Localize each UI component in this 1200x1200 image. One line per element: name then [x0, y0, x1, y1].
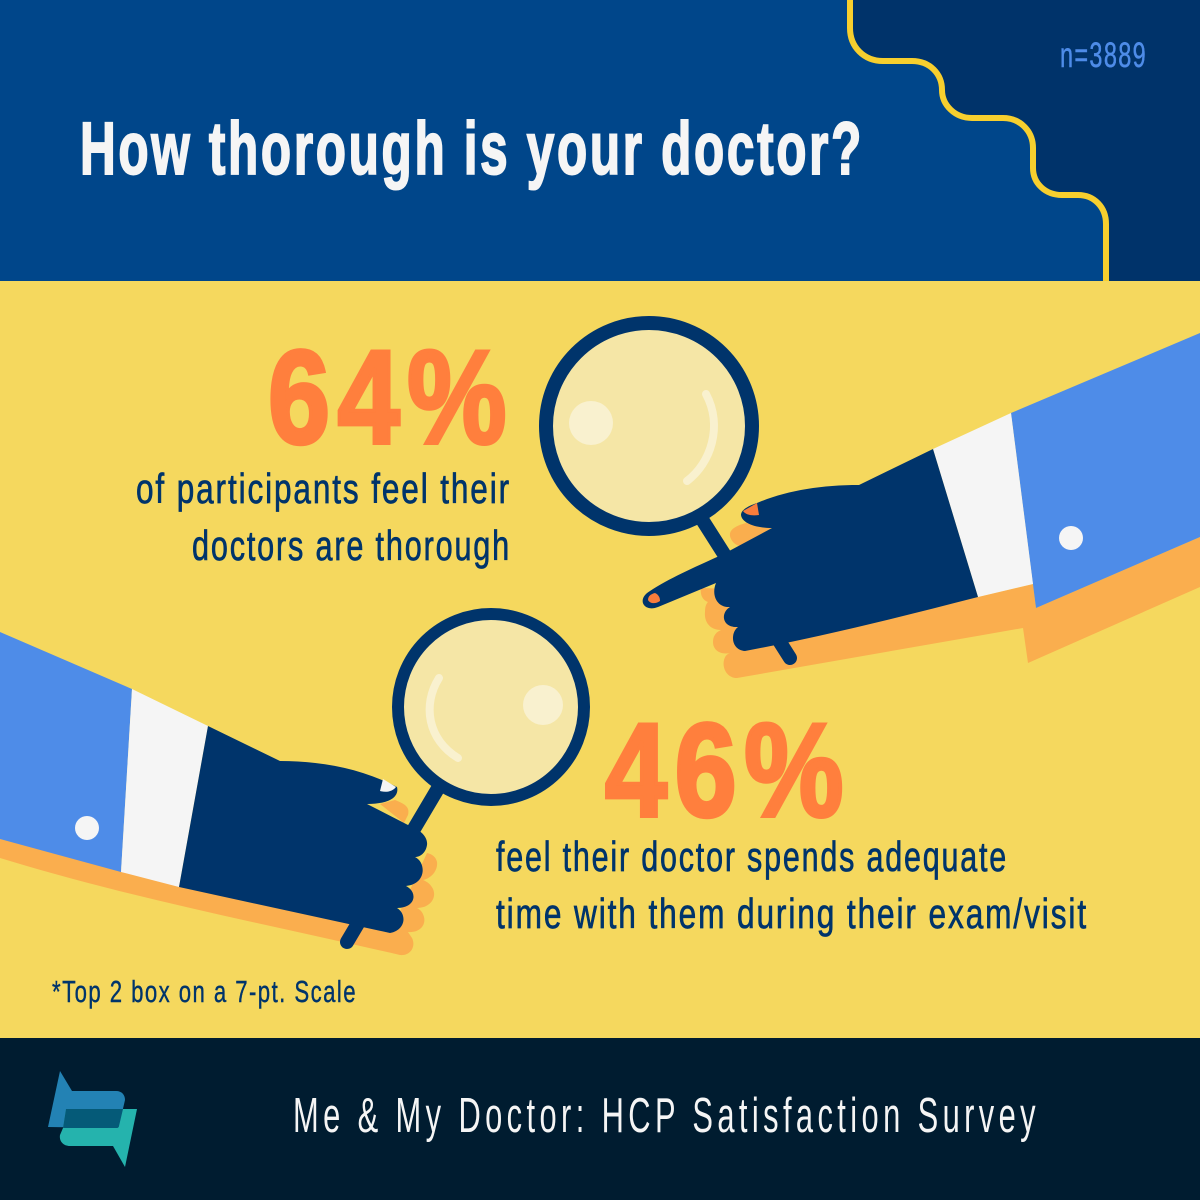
footnote: *Top 2 box on a 7-pt. Scale	[52, 974, 357, 1009]
magnifier handle	[347, 785, 440, 942]
stat number: 46%	[605, 697, 851, 845]
illustration: left hand with magnifying glass	[0, 614, 584, 955]
stat caption	[496, 833, 1088, 937]
stat caption: of participants feel their	[136, 465, 511, 512]
sleeve	[1011, 333, 1200, 608]
stat number: 64%	[268, 324, 514, 472]
lens glare dot	[523, 685, 563, 725]
wavy yellow line	[850, 0, 1106, 281]
sleeve	[0, 632, 132, 872]
shirt cuff	[933, 413, 1033, 597]
stat caption: doctors are thorough	[192, 522, 511, 569]
panel: yellow body	[0, 281, 1200, 1038]
orange thumb shadow	[730, 523, 772, 546]
lens glare arc	[687, 394, 714, 481]
header dark corner	[850, 0, 1200, 281]
magnifier lens	[398, 614, 584, 800]
magnifier handle	[703, 521, 790, 658]
stat: 46 percent	[496, 697, 1088, 937]
navy hand	[643, 449, 978, 651]
index finger nail	[648, 593, 660, 603]
illustration: right hand with magnifying glass	[546, 323, 1200, 678]
navy hand	[179, 726, 427, 933]
panel: footer	[0, 1038, 1200, 1200]
lens glare arc	[430, 678, 458, 758]
orange shadow	[701, 537, 1200, 678]
lens glare dot	[569, 401, 613, 445]
stat caption	[136, 465, 511, 569]
thumb nail	[380, 779, 396, 792]
orange shadow	[0, 839, 437, 955]
cuff button	[1059, 526, 1083, 550]
magnifier lens	[546, 323, 752, 529]
cuff button	[75, 816, 99, 840]
sample size: n=3889	[1060, 36, 1147, 75]
stat caption: feel their doctor spends adequate	[496, 833, 1008, 880]
stat: 64 percent	[136, 324, 514, 569]
thumb nail	[743, 503, 759, 515]
logo: speech bubbles	[48, 1071, 137, 1167]
shirt cuff	[121, 689, 208, 887]
panel: header	[0, 0, 1200, 281]
orange thumb shadow	[380, 800, 408, 823]
